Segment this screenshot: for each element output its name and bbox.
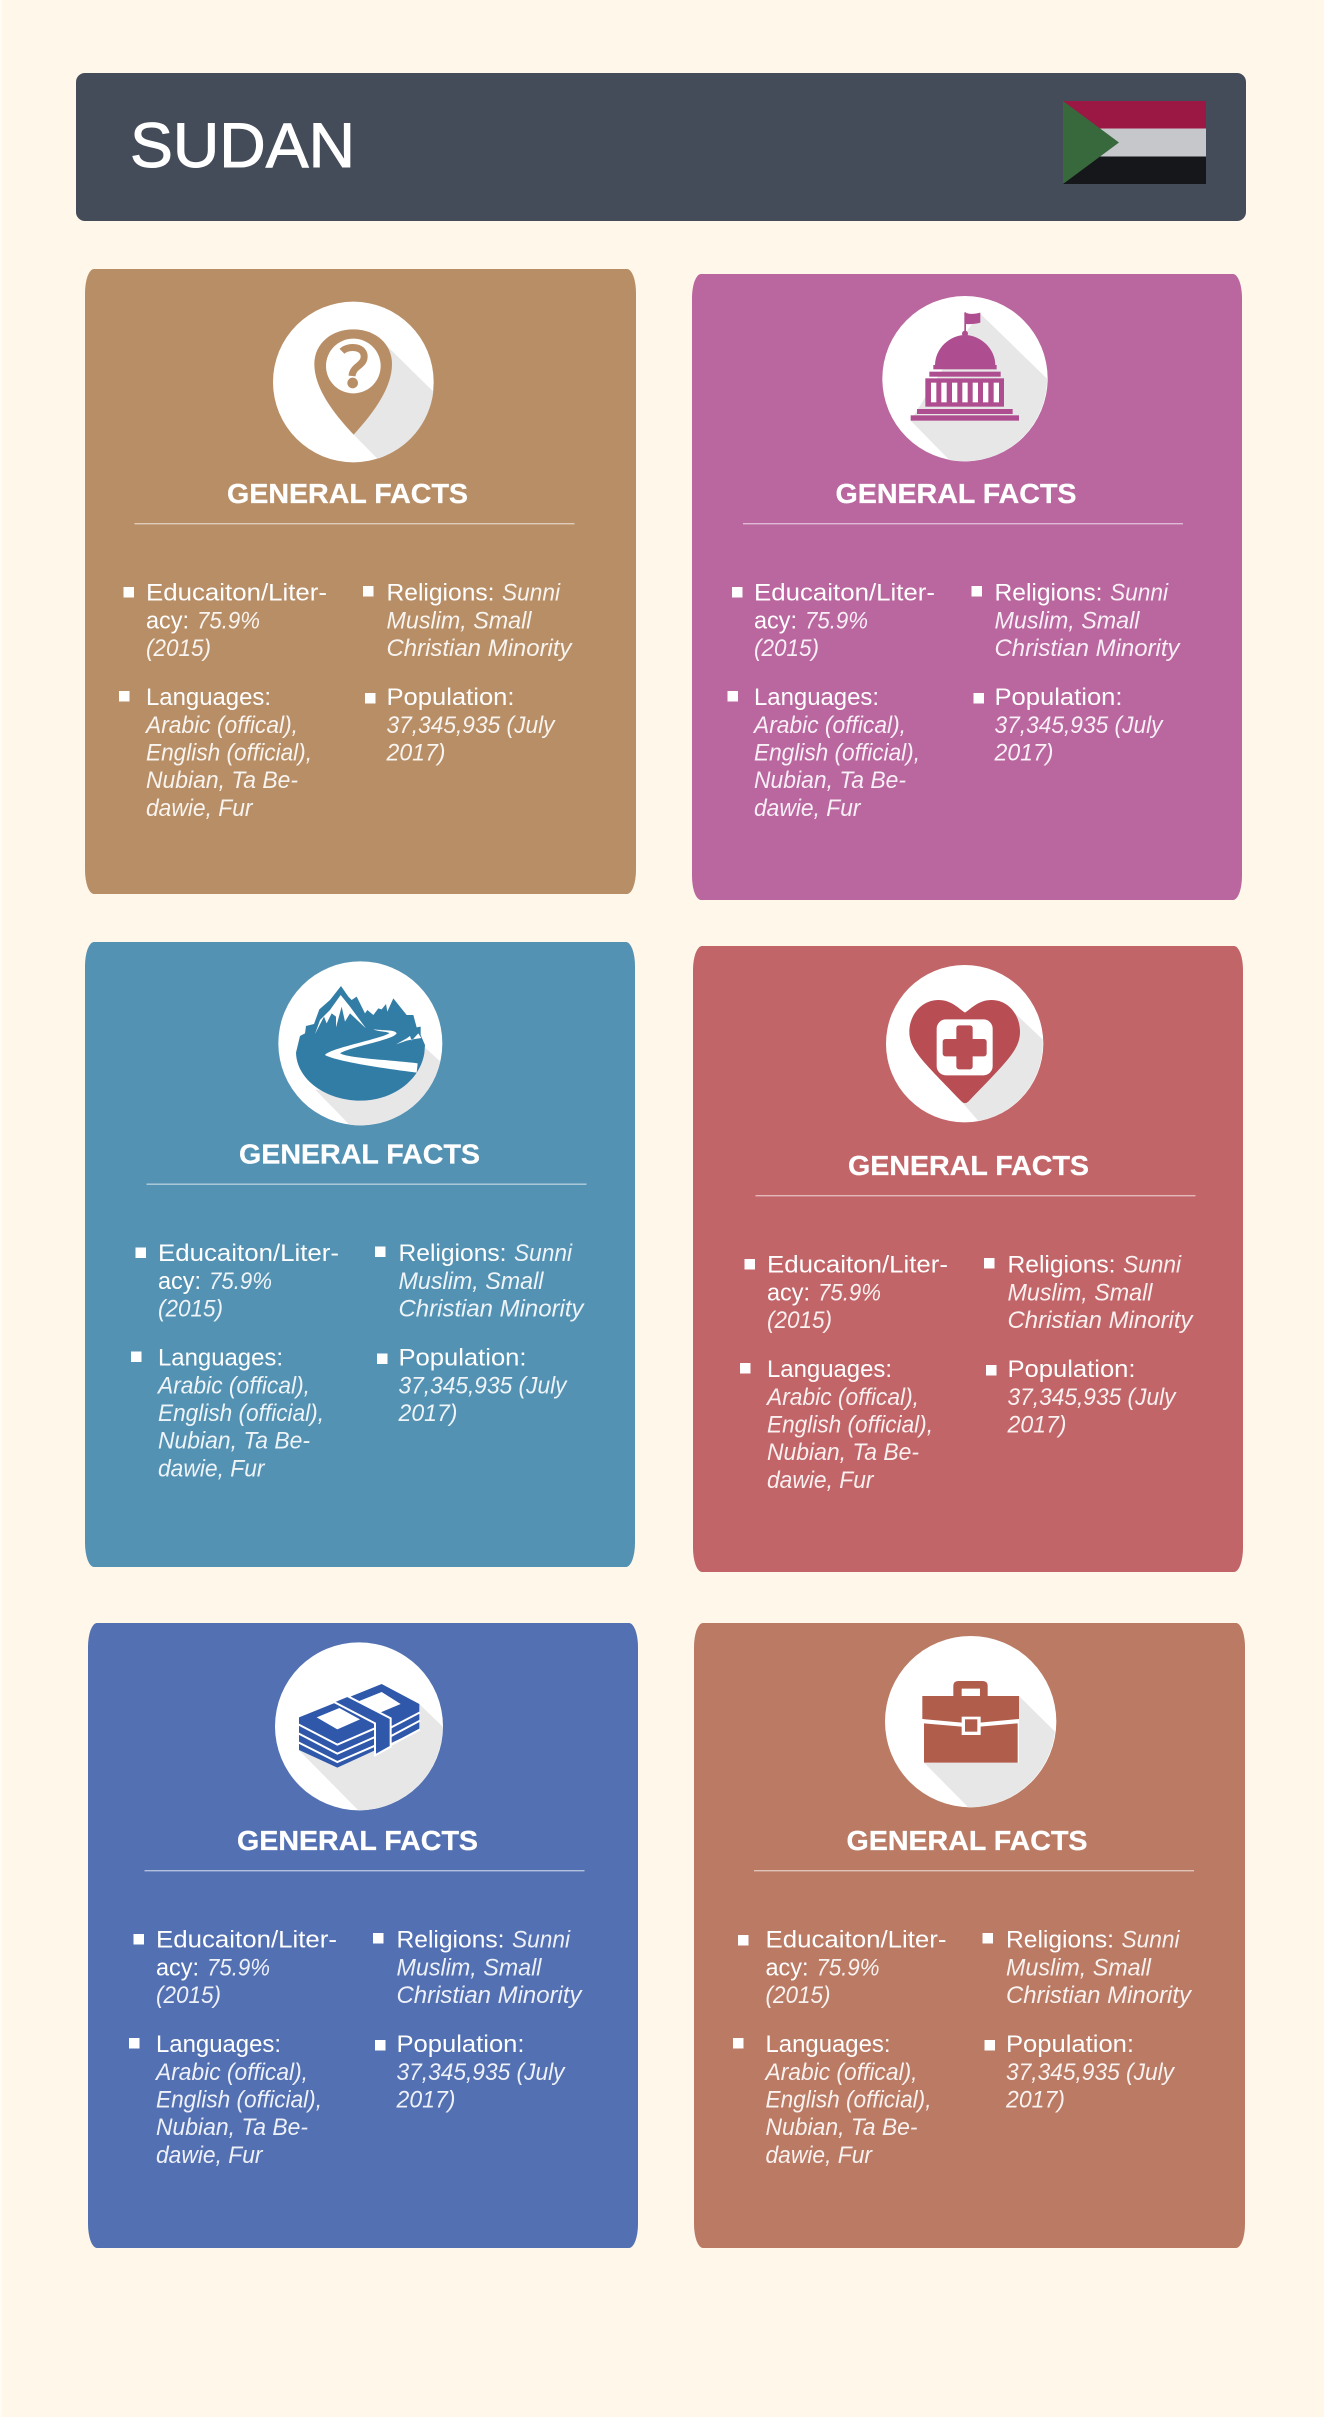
fact: religions [972, 580, 1181, 662]
fact: population: 37,345,935 (July [398, 1372, 568, 1400]
fact: languages [119, 684, 312, 822]
fact: languages: dawie, Fur [767, 1467, 874, 1494]
fact: religions: Muslim, Small [1008, 1280, 1153, 1306]
fact: population: Population: [1006, 2031, 1134, 2058]
fact: population: 2017) [398, 1400, 458, 1427]
fact: religions: Christian Minority [386, 635, 573, 662]
fact: education: acy: [158, 1268, 201, 1295]
fact: education: (2015) [156, 1982, 221, 2009]
heading: GENERAL FACTS [239, 1138, 480, 1170]
panel: general facts, government [692, 274, 1242, 900]
fact: education: 75.9% [818, 1280, 881, 1306]
fact: education: Educaiton/Liter- [156, 1926, 337, 1954]
fact: languages: Nubian, Ta Be- [766, 2114, 918, 2141]
fact: languages: Nubian, Ta Be- [156, 2114, 308, 2141]
fact: religions: Christian Minority [1008, 1307, 1194, 1334]
fact: population: Population: [994, 684, 1122, 711]
fact: languages: Languages: [158, 1344, 283, 1372]
fact: languages: English (official), [754, 740, 920, 766]
fact: religions: Sunni [514, 1240, 573, 1267]
header banner [76, 73, 1246, 221]
fact: religions: Religions: [994, 580, 1102, 606]
title: SUDAN [130, 111, 355, 181]
fact: religions: Religions: [398, 1240, 506, 1267]
fact: languages: English (official), [767, 1412, 933, 1438]
fact: religions: Sunni [1110, 580, 1169, 606]
fact: languages: Arabic (offical), [154, 2059, 308, 2086]
fact: languages: dawie, Fur [146, 795, 253, 822]
icon: stack of money [275, 1642, 443, 1810]
fact: languages: Languages: [156, 2031, 281, 2058]
panel: general facts, geography [85, 942, 635, 1567]
fact: languages: Languages: [767, 1356, 892, 1383]
fact: education: acy: [146, 608, 189, 634]
fact: religions: Christian Minority [396, 1982, 583, 2009]
fact: religions: Sunni [512, 1926, 571, 1954]
fact: religions: Sunni [502, 580, 561, 606]
panel: general facts, health [693, 946, 1243, 1572]
fact: education [732, 580, 935, 662]
fact: education [136, 1240, 339, 1322]
fact: population [974, 684, 1164, 766]
panel: general facts, location [85, 269, 636, 894]
fact: education: Educaiton/Liter- [766, 1926, 946, 1954]
fact: education: acy: [767, 1280, 810, 1306]
fact: education: 75.9% [805, 608, 868, 634]
fact: religions: Religions: [1008, 1252, 1116, 1278]
fact: education [134, 1926, 337, 2009]
fact: languages: English (official), [158, 1400, 324, 1427]
fact: religions: Religions: [1006, 1926, 1114, 1954]
fact: education: (2015) [754, 635, 819, 662]
fact: education: Educaiton/Liter- [158, 1240, 339, 1267]
fact: religions [984, 1252, 1194, 1334]
fact: education: acy: [156, 1954, 199, 1982]
fact: population: Population: [396, 2031, 524, 2058]
fact: languages: Arabic (offical), [144, 712, 298, 739]
heading: GENERAL FACTS [237, 1825, 478, 1856]
fact: religions [373, 1926, 583, 2009]
fact: religions: Muslim, Small [386, 608, 532, 634]
fact: population: 2017) [396, 2086, 456, 2114]
fact: religions [375, 1240, 585, 1322]
fact: population: Population: [386, 684, 514, 711]
fact: religions [982, 1926, 1193, 2009]
fact: languages: Nubian, Ta Be- [754, 767, 906, 794]
fact: population [986, 1356, 1177, 1438]
fact: religions [363, 580, 573, 662]
fact: education: (2015) [767, 1307, 832, 1334]
fact: languages: English (official), [146, 740, 312, 766]
fact: population [375, 2031, 566, 2114]
fact: education: 75.9% [816, 1954, 880, 1982]
fact: education: Educaiton/Liter- [754, 580, 935, 606]
fact: religions: Sunni [1122, 1926, 1180, 1954]
fact: education: 75.9% [207, 1954, 270, 1982]
fact: languages: Arabic (offical), [156, 1372, 310, 1400]
fact: education: (2015) [158, 1296, 223, 1322]
fact: population: 2017) [994, 740, 1054, 766]
fact: languages: dawie, Fur [754, 795, 861, 822]
fact: religions: Muslim, Small [1006, 1954, 1152, 1982]
fact: languages [129, 2031, 322, 2169]
fact: education: (2015) [766, 1982, 830, 2009]
fact: religions: Sunni [1123, 1252, 1182, 1278]
icon: map pin with question mark [273, 302, 434, 462]
fact: languages: English (official), [156, 2086, 322, 2114]
fact: education [738, 1926, 946, 2009]
heading: GENERAL FACTS [846, 1825, 1088, 1856]
fact: religions: Muslim, Small [994, 608, 1140, 634]
fact: population: 2017) [1007, 1412, 1066, 1438]
icon: heart with medical cross [886, 965, 1043, 1122]
fact: languages [740, 1356, 933, 1494]
fact: population [984, 2031, 1176, 2114]
heading: GENERAL FACTS [848, 1150, 1089, 1181]
fact: education: acy: [754, 608, 797, 634]
fact: languages: Nubian, Ta Be- [158, 1428, 310, 1454]
fact: languages: dawie, Fur [156, 2142, 263, 2169]
fact: population [365, 684, 556, 766]
fact: religions: Christian Minority [1006, 1982, 1193, 2009]
fact: languages: dawie, Fur [766, 2142, 873, 2169]
fact: population: 37,345,935 (July [1006, 2059, 1176, 2086]
fact: languages: Nubian, Ta Be- [146, 767, 298, 794]
fact: population: Population: [1008, 1356, 1136, 1383]
fact: population: 2017) [1005, 2086, 1065, 2114]
panel: general facts, economy [88, 1623, 638, 2248]
fact: languages [131, 1344, 324, 1482]
icon: briefcase [885, 1636, 1056, 1807]
heading: GENERAL FACTS [227, 478, 468, 509]
fact: population [377, 1344, 568, 1427]
icon: mountains and river [278, 961, 442, 1125]
fact: religions: Religions: [396, 1926, 504, 1954]
fact: education: 75.9% [197, 608, 260, 634]
fact: languages [733, 2031, 932, 2169]
fact: population: Population: [398, 1344, 526, 1372]
fact: education: Educaiton/Liter- [146, 580, 327, 606]
fact: education: Educaiton/Liter- [767, 1252, 948, 1278]
fact: education [124, 580, 327, 662]
fact: languages: Arabic (offical), [764, 2059, 918, 2086]
fact: religions: Muslim, Small [398, 1268, 544, 1295]
fact: religions: Religions: [386, 580, 494, 606]
fact: languages: Arabic (offical), [765, 1384, 919, 1411]
heading: GENERAL FACTS [836, 478, 1076, 509]
fact: education: acy: [766, 1954, 808, 1982]
fact: languages: Languages: [146, 684, 271, 711]
fact: population: 2017) [386, 740, 446, 766]
fact: population: 37,345,935 (July [994, 712, 1164, 739]
fact: population: 37,345,935 (July [386, 712, 556, 739]
icon: flag of Sudan [1063, 101, 1206, 184]
fact: education [744, 1252, 948, 1334]
fact: religions: Muslim, Small [396, 1954, 542, 1982]
fact: languages: Nubian, Ta Be- [767, 1439, 919, 1466]
fact: languages [728, 684, 920, 822]
fact: religions: Christian Minority [398, 1296, 585, 1322]
panel: general facts, business [694, 1623, 1245, 2248]
icon: capitol building [882, 296, 1048, 461]
fact: languages: Languages: [754, 684, 879, 711]
fact: languages: English (official), [766, 2086, 932, 2114]
fact: languages: Arabic (offical), [752, 712, 906, 739]
fact: population: 37,345,935 (July [396, 2059, 566, 2086]
fact: education: 75.9% [209, 1268, 272, 1295]
fact: religions: Christian Minority [994, 635, 1181, 662]
fact: languages: Languages: [766, 2031, 890, 2058]
fact: population: 37,345,935 (July [1008, 1384, 1177, 1411]
fact: languages: dawie, Fur [158, 1456, 265, 1482]
fact: education: (2015) [146, 635, 211, 662]
